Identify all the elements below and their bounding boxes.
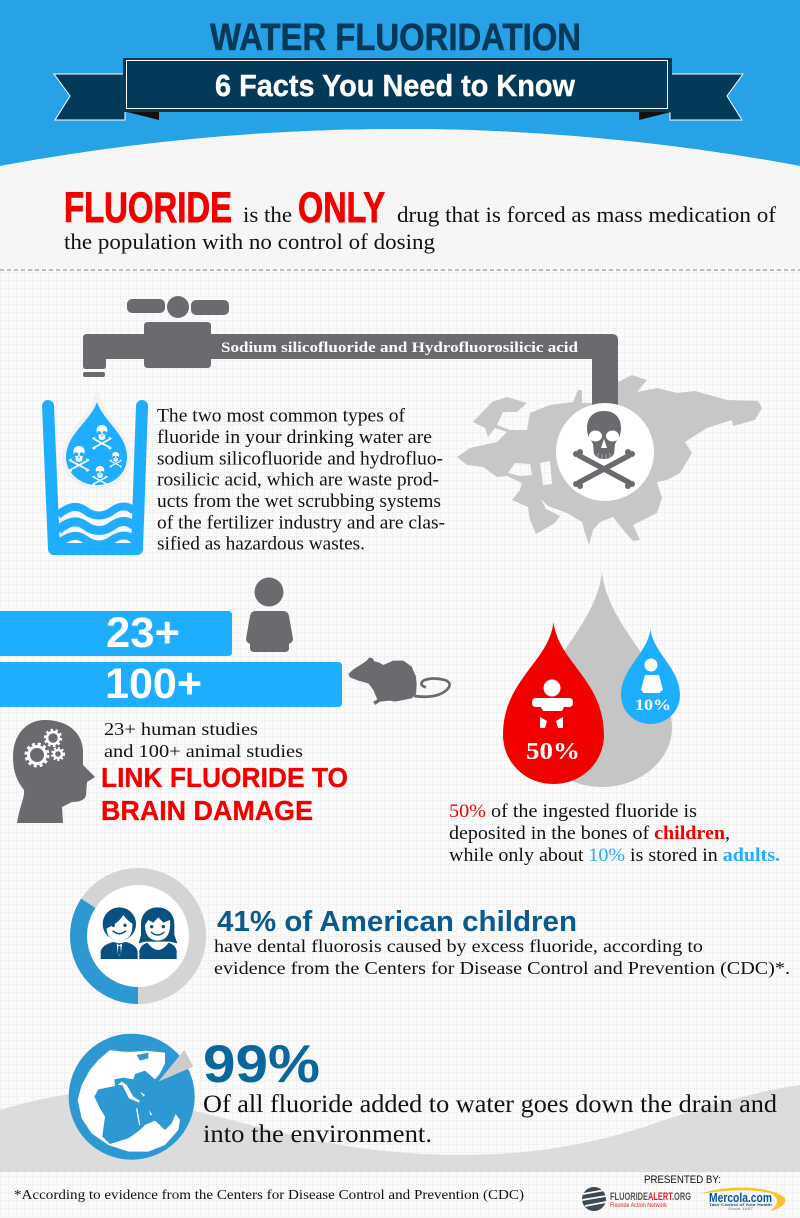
icon: person [246, 578, 293, 652]
icon: baby [532, 680, 573, 728]
icon: globe [69, 1034, 195, 1160]
ribbon heading: 6 Facts You Need to Know [215, 68, 576, 103]
fluoride paragraph [157, 407, 445, 555]
intro statement: the population with no control of dosing [64, 229, 435, 254]
icon: rat [348, 657, 450, 705]
intro statement: drug that is forced as mass medication of [397, 202, 777, 227]
brain damage text: and 100+ animal studies [104, 741, 303, 761]
logo: fluoride alert: Fluoride Action Network [610, 1202, 668, 1209]
fluoride paragraph: ucts from the wet scrubbing systems [157, 492, 441, 512]
fluoride paragraph: sified as hazardous wastes. [157, 535, 365, 555]
bar: animal studies [0, 660, 342, 708]
brain damage text: BRAIN DAMAGE [101, 795, 313, 826]
american children text: 41% of American children [217, 906, 577, 938]
american children text: have dental fluorosis caused by excess fluoride, according to [214, 936, 703, 956]
icon: skull on map [556, 403, 654, 501]
99 percent text: 99% [203, 1035, 320, 1094]
drop: adults 10% [621, 629, 680, 724]
intro statement: is the [243, 202, 292, 227]
header band [0, 0, 800, 166]
icon: children [101, 907, 177, 959]
bones deposit text: while only about 10% is stored in adults. [449, 846, 780, 866]
bar: human studies [0, 609, 232, 657]
world map [457, 375, 762, 545]
donut chart 41% [78, 876, 198, 996]
dashed divider [0, 269, 800, 271]
fluoride paragraph: of the fertilizer industry and are clas- [157, 513, 445, 533]
american children text: evidence from the Centers for Disease Control and Prevention (CDC)*. [214, 958, 790, 979]
intro statement: FLUORIDE [64, 184, 232, 232]
logo: fluoride alert [582, 1187, 691, 1211]
fluoride paragraph: sodium silicofluoride and hydrofluo- [157, 449, 443, 469]
american children text [214, 906, 790, 979]
brain damage text: 23+ human studies [104, 719, 258, 739]
bones deposit text: deposited in the bones of children , [449, 824, 730, 844]
brain damage text: LINK FLUORIDE TO [101, 762, 348, 793]
gray hill [0, 1085, 800, 1172]
99 percent text: into the environment. [203, 1121, 432, 1148]
cone pointer [158, 1050, 193, 1082]
logo: mercola: Take Control of Your Health [709, 1202, 773, 1207]
presented by: PRESENTED BY: [644, 1174, 721, 1186]
bar: human studies: 23+ [106, 609, 180, 657]
fluoride paragraph: fluoride in your drinking water are [157, 428, 432, 448]
pipe label: Sodium silicofluoride and Hydrofluorosilicic acid [221, 340, 578, 356]
logo: mercola: Since 1997 [728, 1207, 753, 1211]
faucet and pipe [83, 296, 618, 405]
drop: children 50%: 50% [526, 739, 580, 765]
fluoride paragraph: rosilicic acid, which are waste prod- [157, 471, 439, 491]
bones deposit text [449, 802, 780, 866]
icon: head with gears [13, 720, 95, 823]
icon: toxic drop [64, 393, 129, 487]
logo: fluoride alert: FLUORIDEALERT.ORG [610, 1191, 691, 1203]
intro statement: ONLY [298, 184, 385, 232]
title: WATER FLUORIDATION [210, 17, 581, 59]
intro statement [64, 184, 777, 254]
logo: mercola: Mercola.com [709, 1190, 772, 1205]
intro background [0, 129, 800, 268]
icon: glass of water [48, 393, 142, 549]
drop: adults 10%: 10% [635, 697, 671, 714]
99 percent text [203, 1035, 778, 1148]
footnote: *According to evidence from the Centers for Disease Control and Prevention (CDC) [14, 1188, 524, 1203]
logo: mercola [700, 1188, 785, 1211]
drop: children 50% [503, 622, 604, 784]
fluoride paragraph: The two most common types of [157, 407, 406, 427]
drop: gray [532, 572, 672, 787]
brain damage text [101, 719, 348, 826]
bones deposit text: 50% of the ingested fluoride is [449, 802, 697, 822]
99 percent text: Of all fluoride added to water goes down the drain and [203, 1091, 778, 1118]
icon: adult [641, 658, 663, 693]
ribbon banner [54, 58, 743, 120]
bar: animal studies: 100+ [105, 660, 202, 708]
